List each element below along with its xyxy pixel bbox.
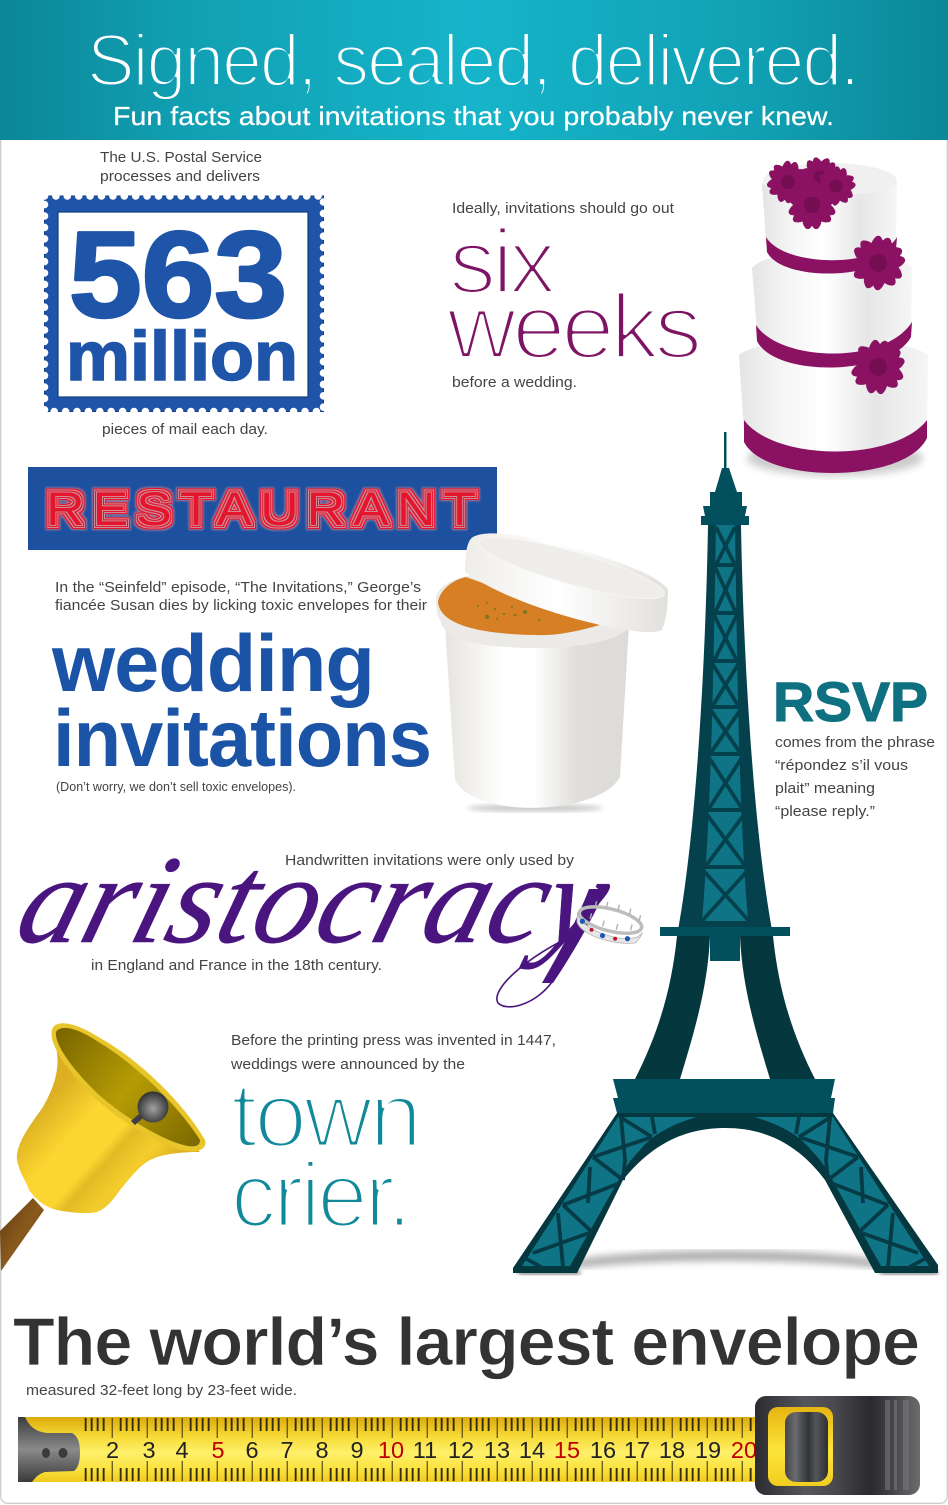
icon: soup container <box>436 533 668 812</box>
sugar flowers <box>762 149 911 396</box>
tape numbers: 14 <box>519 1437 545 1463</box>
stamp <box>44 196 324 412</box>
shaft lattice <box>702 527 749 921</box>
aristocracy intro: Handwritten invitations were only used by <box>285 852 575 869</box>
icon: hand bell <box>0 1023 205 1271</box>
antenna and spire <box>701 432 749 525</box>
icon: Eiffel tower <box>513 432 938 1275</box>
tape numbers <box>106 1437 757 1463</box>
shaft panel <box>702 525 748 921</box>
tape hook <box>18 1417 80 1482</box>
town crier intro: weddings were announced by the <box>230 1056 465 1073</box>
RSVP explanation: comes from the phrase <box>775 734 935 751</box>
upper legs <box>635 936 710 1079</box>
icon: tiara ring <box>572 895 648 948</box>
lid <box>465 533 668 632</box>
tape numbers: 7 <box>280 1437 294 1463</box>
tape numbers: 6 <box>245 1437 259 1463</box>
lower legs and arch <box>513 1113 938 1273</box>
bell handle <box>0 1198 44 1271</box>
panel: postal service stamp <box>44 149 324 438</box>
tape numbers: 17 <box>624 1437 650 1463</box>
tape numbers: 5 <box>211 1437 225 1463</box>
panel: six weeks <box>446 200 699 391</box>
invitations: invitations <box>53 694 431 784</box>
tape numbers: 2 <box>106 1437 119 1463</box>
restaurant sign <box>28 467 497 550</box>
soup <box>438 577 600 635</box>
top tier <box>763 163 897 199</box>
six: six <box>449 211 556 313</box>
tape numbers: 10 <box>378 1437 404 1463</box>
bell body <box>17 1033 200 1213</box>
panel: Seinfeld wedding invitations <box>51 579 431 794</box>
disclaimer: (Don’t worry, we don’t sell toxic envelopes). <box>56 780 296 794</box>
RSVP explanation: “please reply.” <box>775 803 875 820</box>
panel: town crier <box>230 1032 556 1246</box>
tape numbers: 15 <box>554 1437 580 1463</box>
stamp caption: pieces of mail each day. <box>102 421 268 438</box>
bottom tier <box>739 340 928 466</box>
tower shaft <box>678 525 772 930</box>
tape numbers: 3 <box>142 1437 156 1463</box>
panel: aristocracy <box>4 829 627 1007</box>
tape ticks <box>78 1417 763 1482</box>
title: Signed, sealed, delivered. <box>87 20 858 102</box>
crier: crier. <box>231 1144 409 1246</box>
case window <box>768 1407 833 1486</box>
Seinfeld text: fiancée Susan dies by licking toxic envelopes for their <box>55 597 427 614</box>
Seinfeld text: In the “Seinfeld” episode, “The Invitations,” George’s <box>55 579 421 596</box>
RSVP explanation: plait” meaning <box>775 780 875 797</box>
stamp intro text: The U.S. Postal Service <box>100 149 262 166</box>
RSVP explanation: “répondez s’il vous <box>775 757 908 774</box>
subtitle: Fun facts about invitations that you probably never knew. <box>113 101 834 131</box>
town: town <box>231 1064 419 1166</box>
second platform <box>660 927 790 961</box>
tape numbers: 16 <box>590 1437 616 1463</box>
bell mouth <box>52 1023 205 1152</box>
middle tier <box>752 251 912 366</box>
first platform <box>613 1079 835 1113</box>
cup rim <box>436 572 629 648</box>
tape numbers: 12 <box>448 1437 474 1463</box>
weeks: weeks <box>446 276 699 378</box>
tape blade <box>18 1417 763 1482</box>
neon lettering: RESTAURANT <box>46 482 484 535</box>
tape numbers: 20 <box>731 1437 757 1463</box>
tape numbers: 4 <box>175 1437 189 1463</box>
cup body <box>445 625 629 808</box>
563: 563 <box>69 206 287 342</box>
tape case <box>755 1396 920 1495</box>
tower shadow <box>575 1251 880 1268</box>
tape numbers: 9 <box>350 1437 364 1463</box>
tape numbers: 11 <box>413 1437 437 1463</box>
envelope caption: measured 32-feet long by 23-feet wide. <box>26 1382 297 1399</box>
six weeks caption: before a wedding. <box>452 374 577 391</box>
tape numbers: 18 <box>659 1437 685 1463</box>
town crier intro: Before the printing press was invented in 1447, <box>231 1032 556 1049</box>
y swash <box>497 889 606 1007</box>
stamp intro text: processes and delivers <box>100 168 260 185</box>
six weeks intro: Ideally, invitations should go out <box>452 200 675 217</box>
right leg lattice <box>754 1117 929 1268</box>
million: million <box>66 317 298 395</box>
panel: RSVP <box>773 670 935 820</box>
wedding: wedding <box>51 619 374 709</box>
tape numbers: 13 <box>484 1437 510 1463</box>
RSVP heading: RSVP <box>773 670 928 733</box>
aristocracy word: aristocracy <box>4 829 627 969</box>
envelope heading: The world’s largest envelope <box>13 1304 919 1380</box>
panel: largest envelope <box>13 1304 919 1399</box>
left leg lattice <box>522 1117 697 1268</box>
header banner <box>0 0 948 140</box>
bell clapper <box>131 1106 152 1125</box>
tape measure <box>18 1396 920 1495</box>
icon: wedding cake <box>739 149 928 476</box>
aristocracy caption: in England and France in the 18th century. <box>91 957 382 974</box>
tape numbers: 8 <box>315 1437 329 1463</box>
tape numbers: 19 <box>695 1437 721 1463</box>
soup herbs <box>477 602 540 621</box>
